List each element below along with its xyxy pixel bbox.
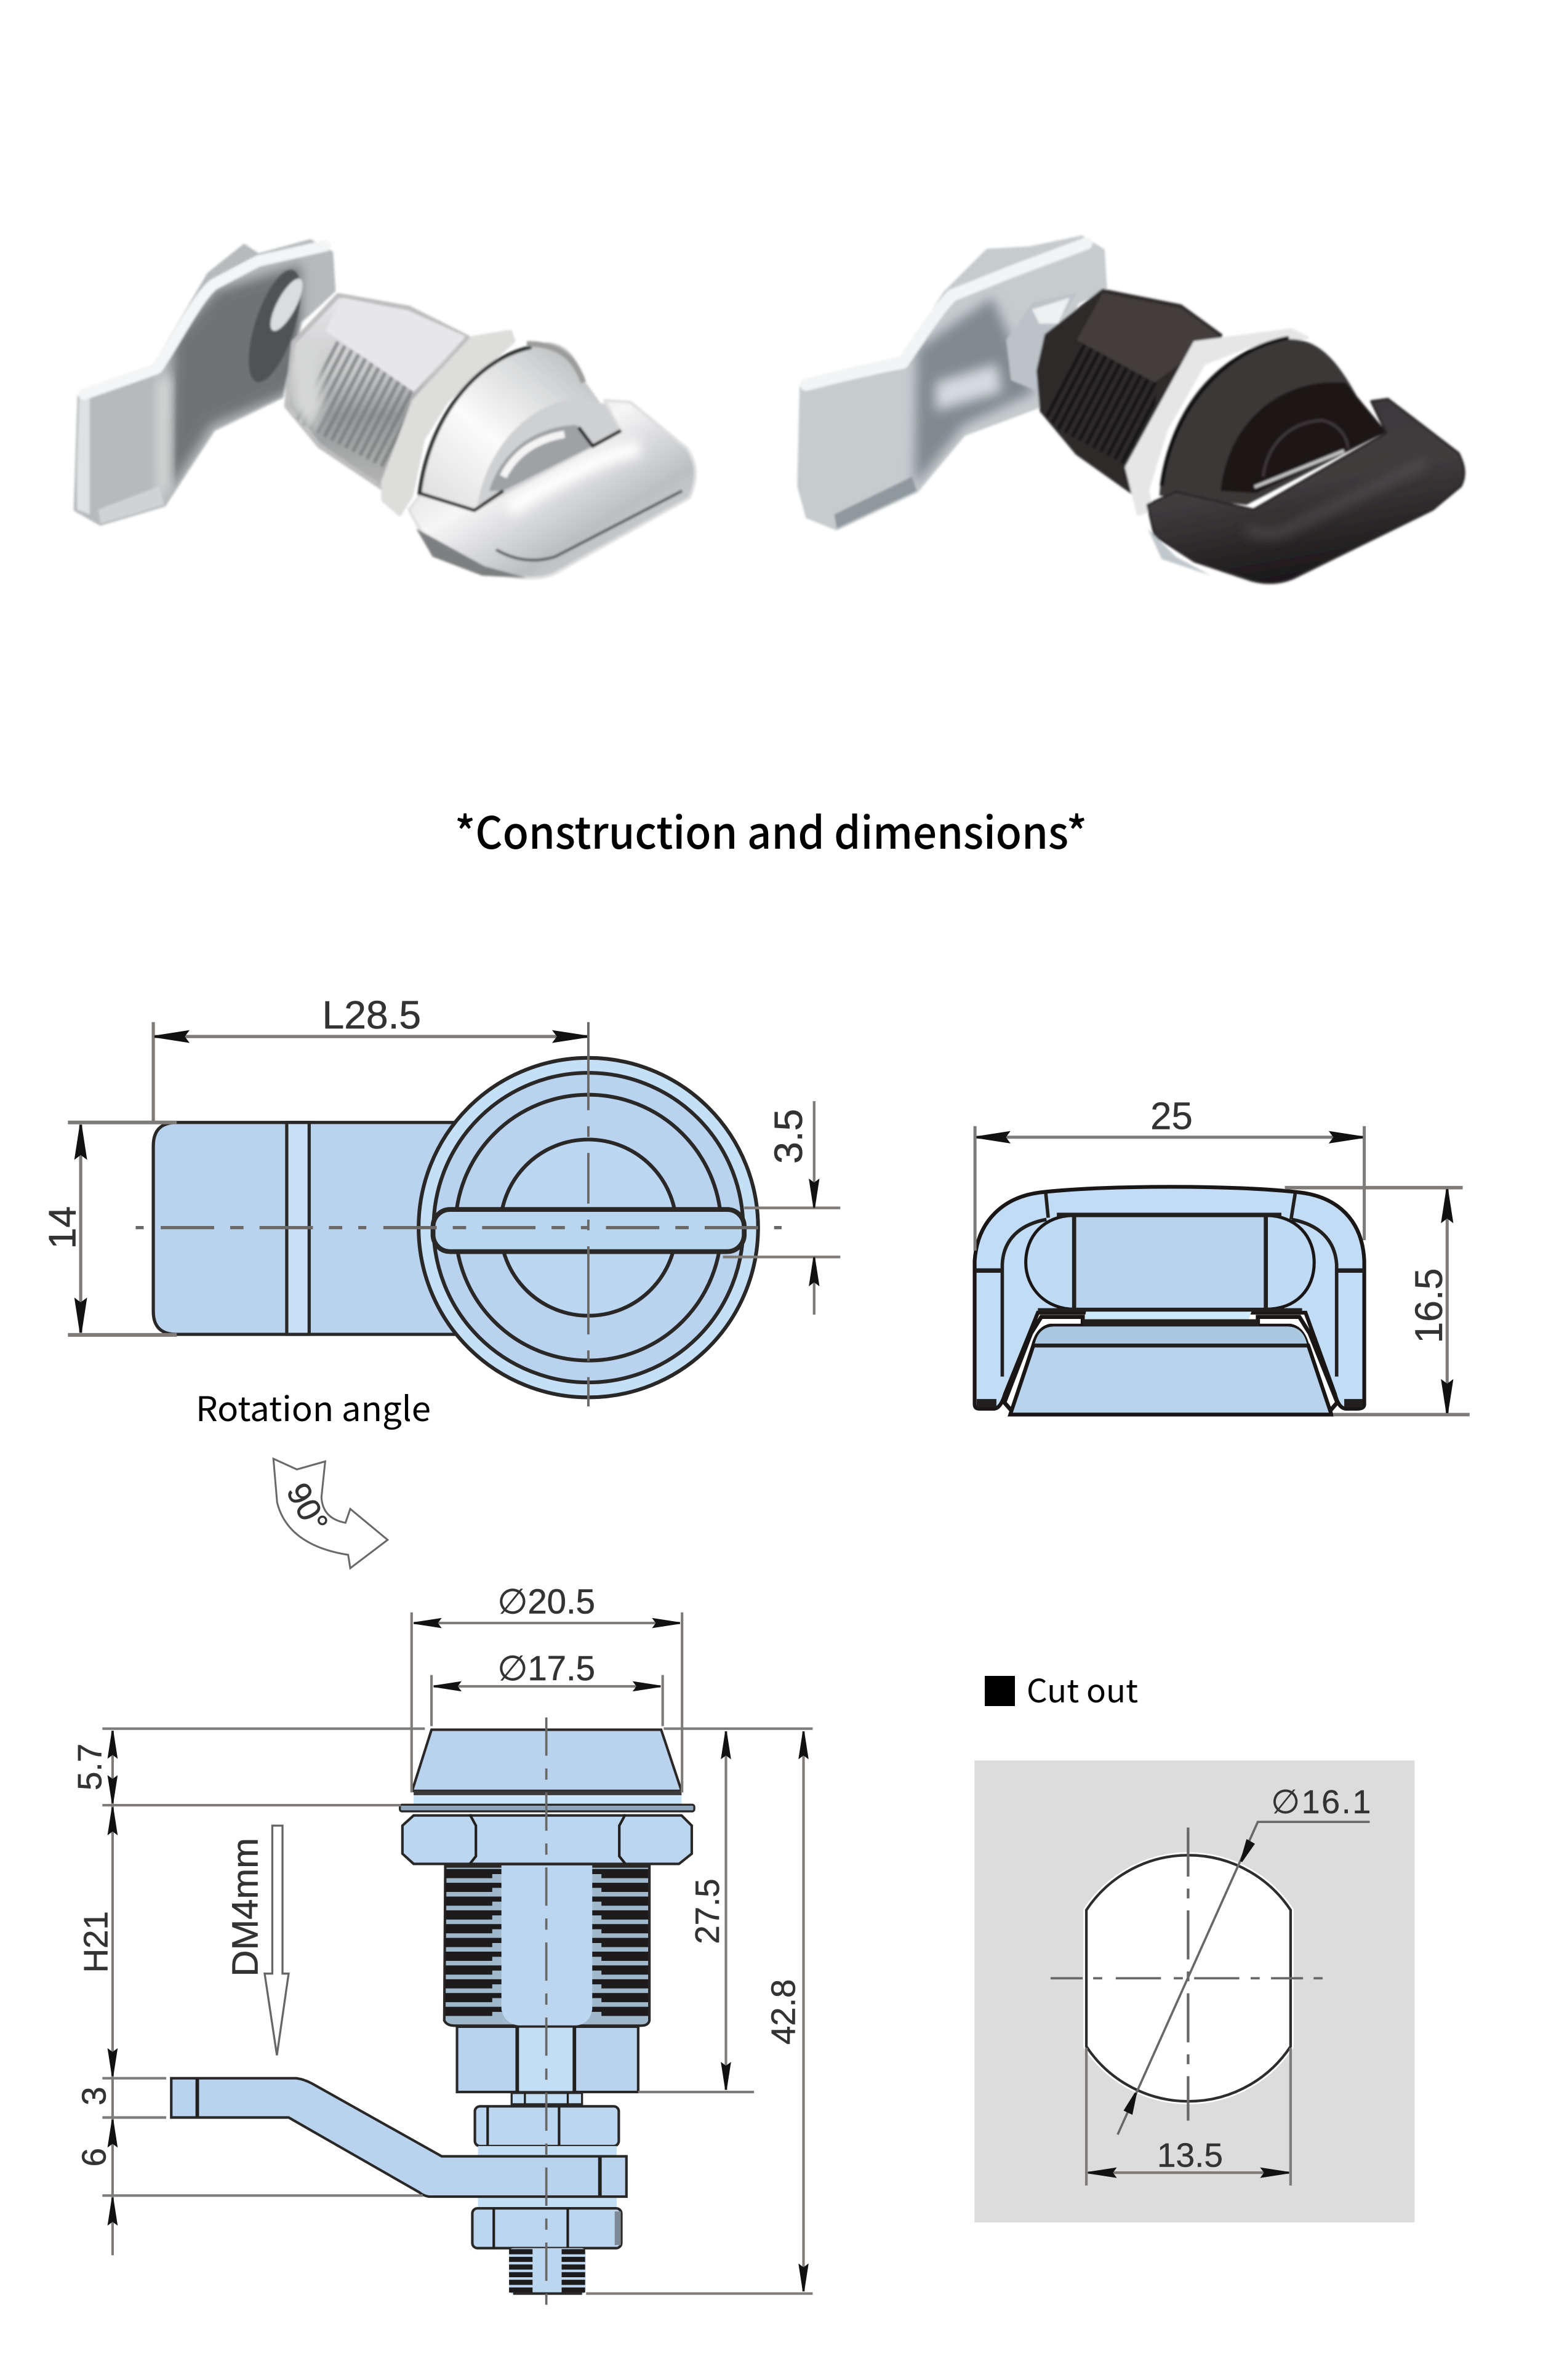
cam nut [1006,293,1077,392]
product photo: chrome cam lock [76,241,695,578]
DM4mm panel thickness arrow: DM4mm [224,1838,265,1977]
left dimension chain: 5.7, H21, 3, 6: 3 [74,2086,113,2106]
dimension 16.5 [1285,1188,1470,1414]
bottom caps of handle legs [977,1396,1363,1411]
plate [153,1123,464,1334]
icon: 90 degree rotation arrow [273,1459,388,1568]
drawing: front elevation of lock [71,1582,812,2313]
dimension 14: 14 [41,1206,84,1249]
upper cam nut [475,2106,619,2146]
dimension 3.5 [723,1101,840,1315]
dimension diameter 16.1: ∅16.1 [1271,1784,1371,1821]
threads [1067,373,1157,420]
base upper band [1035,1326,1307,1345]
hex nut [403,1814,692,1864]
lower cam nut [472,2208,622,2248]
thread ribs [291,338,419,435]
centre line [545,1717,548,2313]
paddle [409,401,695,578]
dimension 13.5: 13.5 [1157,2136,1223,2174]
icon: 90 degree rotation arrow: 90° [279,1477,335,1539]
central shank [502,1865,592,2025]
chrome ring [1126,330,1308,515]
DM4mm panel thickness arrow [224,1825,289,2055]
plate top edge highlight [84,246,325,395]
panel: cut out drawing [974,1760,1414,2222]
dimension diameter 17.5 [431,1649,663,1726]
handle inner edges [1002,1219,1337,1377]
flat of body [1077,293,1218,382]
left dimension chain: 5.7, H21, 3, 6: 5.7 [71,1744,109,1790]
dimension diameter 16.1 [1118,1784,1371,2134]
right gap between handle and base [1258,1317,1337,1411]
left dimension chain: 5.7, H21, 3, 6: H21 [77,1911,115,1973]
paddle [1148,399,1464,583]
second ring [433,1073,743,1382]
face ring [455,1095,721,1361]
dimension 14 [41,1123,177,1335]
centre lines [1186,1827,1190,2121]
square shank [457,2027,638,2092]
drawing: top view of handle [41,993,840,1568]
dimension 13.5 [1086,2048,1291,2186]
cam plate [799,238,1105,529]
lug side panels [1028,1217,1312,1307]
dimension 25: 25 [1150,1095,1193,1137]
thumb bar [433,1209,744,1252]
dimension 3.5: 3.5 [766,1109,811,1164]
inner ring [500,1140,676,1316]
slot outline [419,427,621,511]
cam plate [76,241,334,524]
paddle highlight [1246,463,1425,534]
slot strip [1254,451,1344,487]
key slot inner [489,425,593,491]
outer ring [419,1058,758,1397]
bolt end [509,2248,585,2294]
dome rim [1162,338,1289,486]
dimension 42.8: 42.8 [764,1979,802,2045]
left gap between handle and base [1004,1317,1083,1411]
dimension diameter 17.5: ∅17.5 [497,1649,595,1688]
dimension 27.5: 27.5 [688,1878,726,1944]
inner lug [1263,420,1348,476]
base trapezoid [1010,1345,1331,1414]
grey panel [974,1760,1414,2222]
drawing: side view of handle [975,1095,1470,1414]
dimension 25 [975,1095,1365,1251]
flat of body [325,298,465,392]
product photo: black cam lock [799,238,1464,583]
plate shading [835,298,1035,529]
plate shading [77,265,301,524]
dome rim [419,347,532,495]
left dimension chain: 5.7, H21, 3, 6 [71,1729,425,2255]
cam nut [238,264,312,388]
inner black half disc [1220,382,1387,493]
dimension L28.5: L28.5 [323,993,421,1037]
threaded body [287,295,468,489]
threaded body [444,1865,649,2025]
cut out shape [1086,1855,1291,2101]
centre lug [1026,1216,1314,1309]
washer [400,1805,694,1811]
handle segment lines [976,1267,1365,1275]
paddle lower edge [496,491,682,560]
handle body [975,1187,1365,1409]
plate under knob [1148,529,1211,575]
centre lines [135,1226,782,1230]
title: *Construction and dimensions* [455,797,1087,862]
black threaded body [1038,290,1220,493]
dimension diameter 20.5 [412,1582,682,1792]
paddle underside [416,529,527,578]
key slot dome [478,399,621,505]
left dimension chain: 5.7, H21, 3, 6: 6 [74,2148,113,2166]
plate top edge highlight [806,244,1086,385]
dimension diameter 20.5: ∅20.5 [497,1582,595,1621]
neck [511,2093,582,2104]
head cap [412,1729,681,1791]
spacer strip [1084,1310,1252,1320]
dimension 27.5 [638,1729,812,2092]
cam [171,2078,627,2197]
dome [419,342,621,512]
dome [1160,339,1385,505]
dimension 16.5: 16.5 [1408,1268,1451,1344]
hex ring [383,332,513,515]
plate groove [287,1123,309,1334]
label: rotation angle: Rotation angle [196,1382,431,1431]
heading: cut out: Cut out [1027,1665,1138,1712]
